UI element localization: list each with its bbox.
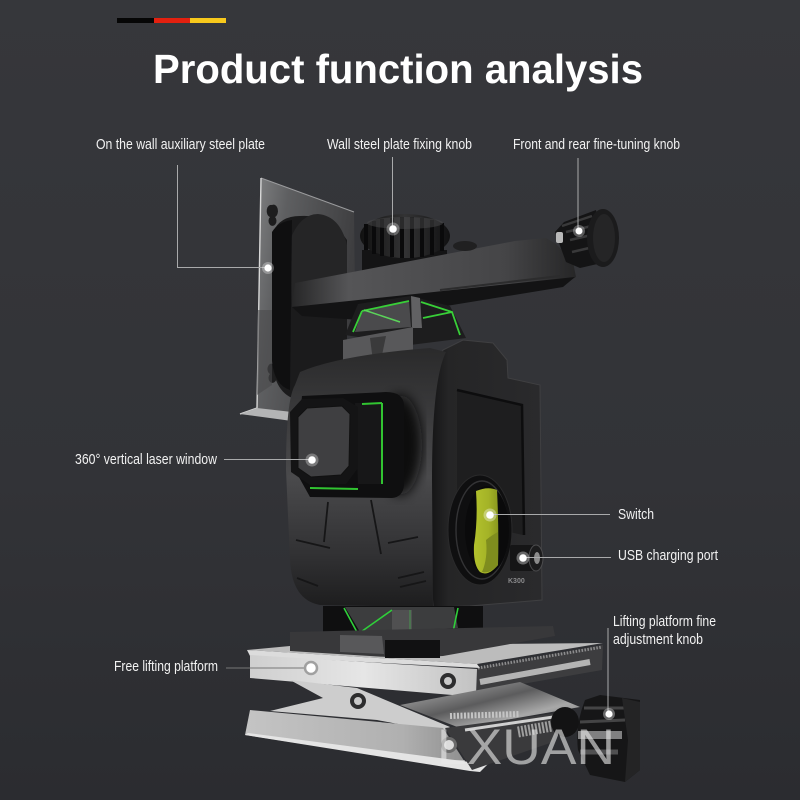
model mark: K300	[508, 578, 525, 585]
top surface and rails	[247, 643, 603, 664]
base plate	[245, 710, 470, 770]
watermark: LXUAN	[437, 719, 615, 775]
callout: usb charging port: USB charging port	[618, 547, 719, 564]
body panel grooves	[296, 500, 426, 587]
callout: on the wall auxiliary steel plate	[96, 136, 274, 274]
free lifting platform	[245, 606, 603, 772]
callout: wall steel plate fixing knob: Wall steel plate fixing knob	[327, 136, 472, 153]
wall auxiliary steel plate	[240, 178, 355, 421]
decorative flag stripe	[117, 18, 226, 23]
laser body: side face	[425, 340, 542, 607]
body recess panel	[457, 390, 524, 535]
mounting bar	[292, 238, 576, 320]
callout: on the wall auxiliary steel plate: On the wall auxiliary steel plate	[96, 136, 265, 153]
callout: usb charging port	[516, 547, 719, 564]
front and rear fine-tuning knob	[555, 209, 619, 268]
usb charging port	[510, 545, 543, 571]
scissor arm	[270, 680, 450, 732]
callout: lifting platform fine adjustment knob: adjustment knob	[613, 631, 703, 648]
callout: switch: Switch	[618, 506, 654, 523]
laser body: front face	[286, 348, 446, 607]
callout: free lifting platform	[114, 658, 317, 675]
screws	[440, 673, 456, 689]
lifting platform fine adjustment knob	[551, 695, 640, 782]
scissor interior	[400, 682, 580, 728]
callout: front and rear fine-tuning knob: Front and rear fine-tuning knob	[513, 136, 680, 153]
title: Product function analysis	[153, 46, 643, 92]
callout: lifting platform fine adjustment knob: Lifting platform fine	[613, 613, 716, 630]
360 degree vertical laser window	[290, 392, 422, 498]
switch	[448, 475, 512, 585]
wall steel plate fixing knob	[360, 214, 450, 276]
callout: lifting platform fine adjustment knob	[603, 613, 716, 720]
product: laser level assembly	[240, 178, 640, 782]
callout: front and rear fine-tuning knob	[513, 136, 680, 237]
callout: wall steel plate fixing knob	[327, 136, 472, 236]
callout: switch	[484, 506, 654, 523]
lower mount and green laser	[290, 606, 555, 658]
callout: 360 degree vertical laser window: 360° vertical laser window	[75, 451, 217, 468]
callout: free lifting platform: Free lifting platform	[114, 658, 218, 675]
top laser window	[343, 296, 466, 364]
top plate front	[247, 650, 480, 668]
